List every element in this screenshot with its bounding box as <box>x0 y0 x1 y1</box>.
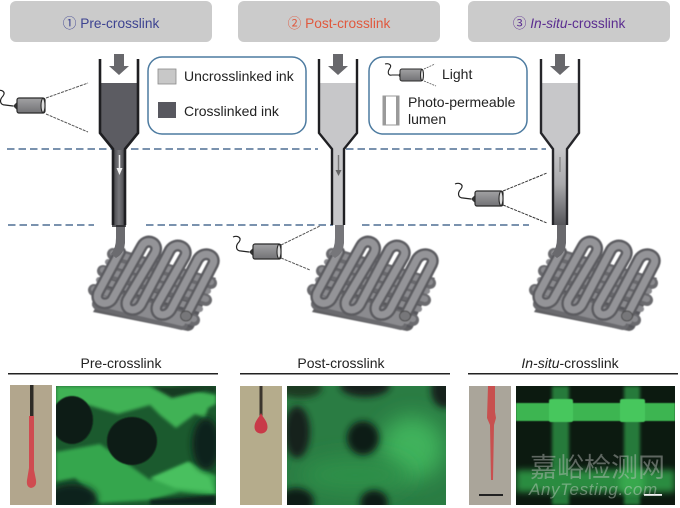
watermark: 嘉峪检测网 <box>530 446 665 485</box>
micrograph: in-situ grid <box>516 386 675 505</box>
header: Post-crosslink <box>238 1 440 42</box>
legend: light and lumen <box>369 57 527 134</box>
photo: in-situ filament <box>469 386 511 505</box>
micrograph: post-crosslink <box>287 386 446 505</box>
legend: light and lumen: Photo-permeable <box>408 94 516 110</box>
legend: ink types <box>148 57 306 134</box>
nozzle 1: pre-crosslink <box>100 54 138 258</box>
header: In-situ-crosslink: ③ In-situ-crosslink <box>513 16 625 31</box>
panel: Pre-crosslink result <box>8 355 220 508</box>
light source 3 <box>455 173 547 223</box>
panel: Post-crosslink result <box>240 355 459 508</box>
watermark: AnyTesting.com <box>528 480 658 499</box>
panel: Pre-crosslink result: Pre-crosslink <box>81 355 162 371</box>
light source 1 <box>0 83 88 132</box>
panel: In-situ-crosslink result <box>468 355 678 505</box>
legend: light and lumen: lumen <box>408 111 446 127</box>
photo: pre-crosslink filament <box>10 385 52 505</box>
micrograph: pre-crosslink <box>47 386 220 508</box>
legend: ink types: Uncrosslinked ink <box>184 68 295 84</box>
nozzle 2: post-crosslink <box>319 54 357 258</box>
light source 2 <box>233 226 320 270</box>
legend: ink types: Crosslinked ink <box>184 103 280 119</box>
panel: Post-crosslink result: Post-crosslink <box>297 355 386 371</box>
scaffold 2 <box>311 242 435 331</box>
legend: light and lumen: Light <box>442 66 472 82</box>
nozzle 3: in-situ-crosslink <box>541 54 579 258</box>
scaffold 1 <box>92 242 216 331</box>
panel: In-situ-crosslink result: In-situ-crosslink <box>521 355 620 371</box>
header: Pre-crosslink: ① Pre-crosslink <box>63 16 159 31</box>
photo: post-crosslink droplet <box>240 386 282 505</box>
dashed guide lines <box>7 149 546 225</box>
header: Pre-crosslink <box>10 1 212 42</box>
scaffold 3 <box>533 242 657 331</box>
header: In-situ-crosslink <box>468 1 670 42</box>
header: Post-crosslink: ② Post-crosslink <box>288 16 390 31</box>
